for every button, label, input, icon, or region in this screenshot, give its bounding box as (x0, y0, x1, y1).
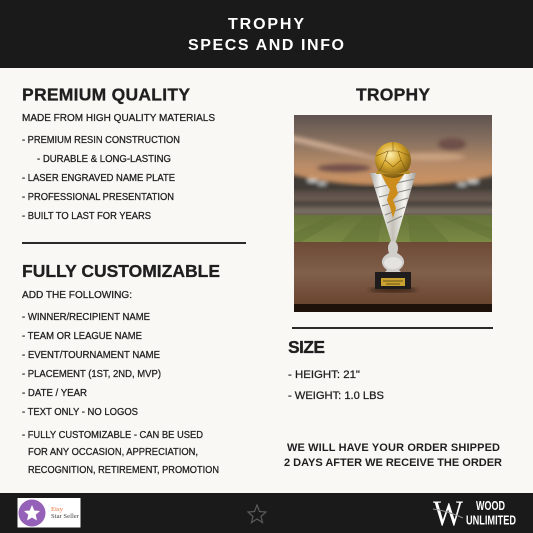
header title (188, 16, 344, 54)
table (294, 242, 492, 291)
text block: size specs: - HEIGHT: 21" (288, 369, 360, 381)
trophy (369, 142, 417, 292)
text block: quality list: - PROFESSIONAL PRESENTATION (22, 192, 174, 203)
header title: TROPHY (228, 16, 304, 33)
logo: wood unlimited: WOOD (476, 499, 505, 513)
text block: customization list: - TEXT ONLY - NO LOGOS (22, 407, 138, 418)
heading: size: SIZE (288, 337, 325, 357)
text block: size specs: - WEIGHT: 1.0 LBS (288, 390, 384, 402)
panel: premium quality (22, 84, 215, 222)
photo: trophy in stadium (285, 115, 500, 312)
callout: shipping (284, 442, 502, 469)
text block: quality list: - BUILT TO LAST FOR YEARS (22, 211, 151, 222)
logo: wood unlimited: UNLIMITED (466, 514, 516, 528)
text block: customization list: - DATE / YEAR (22, 388, 87, 399)
text block: quality list: - PREMIUM RESIN CONSTRUCTION (22, 135, 180, 146)
panel: size (288, 337, 384, 402)
logo: wood unlimited (433, 493, 516, 533)
logo: wood unlimited: W (433, 493, 463, 533)
stands (285, 173, 500, 217)
sky (294, 115, 492, 187)
callout: shipping: 2 DAYS AFTER WE RECEIVE THE ORDER (284, 457, 502, 469)
text block: customization list: FOR ANY OCCASION, APPRECIATION, (28, 447, 198, 458)
text block: customization list: ADD THE FOLLOWING: (22, 290, 132, 301)
text block: customization list: - TEAM OR LEAGUE NAME (22, 331, 142, 342)
badge: etsy star seller (18, 498, 80, 528)
text block: customization list: RECOGNITION, RETIREMENT, PROMOTION (28, 465, 219, 476)
text block: quality list: MADE FROM HIGH QUALITY MATERIALS (22, 113, 215, 124)
icon: purple star badge (18, 500, 46, 526)
header band (0, 0, 533, 68)
text block: customization list: - PLACEMENT (1ST, 2ND, MVP) (22, 369, 161, 380)
text block: quality list: - LASER ENGRAVED NAME PLATE (22, 173, 175, 184)
callout: shipping: WE WILL HAVE YOUR ORDER SHIPPED (287, 442, 500, 454)
text block: customization list: - EVENT/TOURNAMENT NAME (22, 350, 160, 361)
badge: etsy star seller: Star Seller (51, 514, 79, 520)
text block: quality list: - DURABLE & LONG-LASTING (37, 154, 171, 165)
text block: customization list (22, 290, 219, 476)
panel: fully customizable (22, 261, 220, 476)
heading: fully customizable: FULLY CUSTOMIZABLE (22, 261, 220, 281)
heading: premium quality: PREMIUM QUALITY (22, 84, 190, 104)
text block: customization list: - FULLY CUSTOMIZABLE - CAN BE USED (22, 430, 203, 441)
text block: customization list: - WINNER/RECIPIENT NAME (22, 312, 150, 323)
heading: trophy: TROPHY (356, 84, 430, 104)
footer band (0, 493, 533, 533)
field (294, 215, 492, 243)
badge: etsy star seller: Etsy (51, 507, 63, 513)
text block: quality list (22, 113, 215, 222)
header title: SPECS AND INFO (188, 37, 344, 54)
text block: size specs (288, 369, 384, 402)
icon: outline star (248, 505, 266, 522)
